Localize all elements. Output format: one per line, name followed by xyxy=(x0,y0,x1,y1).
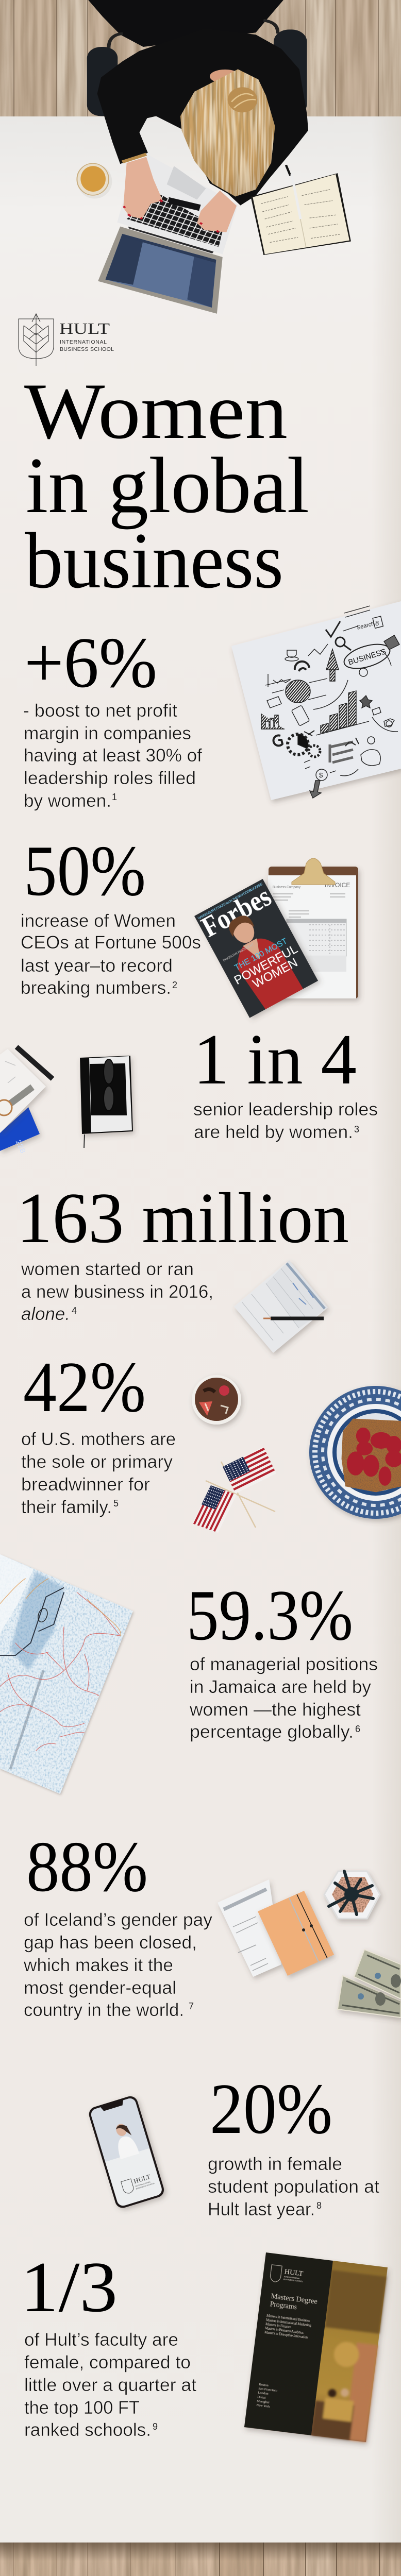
brochure logo: HULT xyxy=(284,2267,304,2278)
brochure logo xyxy=(270,2265,305,2285)
illustration: Forbes magazine: WOMEN xyxy=(250,956,300,991)
illustration: watch, marble paper and blue card: 228 xyxy=(13,1139,27,1155)
stat: +6%: - boost to net profit xyxy=(23,701,177,721)
pen xyxy=(271,1317,324,1320)
brochure photo details xyxy=(311,2270,387,2442)
stat: 20%: 8 xyxy=(316,2200,322,2211)
gold clip xyxy=(292,858,335,885)
stat: 1/3: ranked schools. xyxy=(24,2420,151,2440)
brochure title: Dubai xyxy=(257,2395,266,2400)
hands xyxy=(123,157,237,232)
wood floor bottom xyxy=(0,2543,401,2576)
phone logo: BUSINESS SCHOOL xyxy=(136,2182,156,2190)
illustration: phone with Hult page xyxy=(87,2094,166,2210)
stat: 50%: increase of Women xyxy=(21,911,176,931)
stat: +6%: having at least 30% of xyxy=(24,745,202,766)
stat: 163 million: alone. xyxy=(21,1304,70,1324)
stat: 1 in 4: senior leadership roles xyxy=(193,1099,378,1120)
title: Women xyxy=(24,367,288,455)
toast and strawberries xyxy=(342,1418,401,1492)
stat: 20% xyxy=(208,2069,379,2219)
stat: 88%: 88% xyxy=(26,1827,148,1907)
stat: +6% xyxy=(23,623,202,811)
stat: 50%: last year–to record xyxy=(21,956,173,976)
chair xyxy=(87,0,307,116)
stat: 1 in 4: 1 in 4 xyxy=(193,1020,357,1099)
stat: 1/3: the top 100 FT xyxy=(24,2398,140,2418)
icon: wheat shield xyxy=(19,314,54,366)
stat: 88%: 7 xyxy=(189,2001,194,2011)
illustration: blue willow plate with toast xyxy=(309,1386,401,1519)
stat: 42%: of U.S. mothers are xyxy=(21,1429,176,1449)
stat: 20%: student population at xyxy=(208,2177,379,2197)
stat: 59.3%: 59.3% xyxy=(187,1575,353,1655)
stat: +6%: by women. xyxy=(24,791,111,811)
stat: 1/3: 1/3 xyxy=(21,2247,118,2327)
brochure title: Masters in International Marketing xyxy=(266,2318,312,2328)
brochure title: Masters in International Business xyxy=(266,2314,310,2323)
stat: 163 million: 4 xyxy=(72,1306,77,1316)
wood floor top xyxy=(0,0,401,116)
stat: 163 million xyxy=(16,1178,349,1324)
flag two xyxy=(192,1485,237,1533)
stat: 20%: Hult last year. xyxy=(208,2199,315,2219)
stat: 163 million: a new business in 2016, xyxy=(21,1282,213,1302)
watch xyxy=(122,154,146,162)
illustration: invoice on clipboard: INVOICE xyxy=(325,882,350,889)
logo: Hult International Business School: INTERNATIONAL xyxy=(60,339,107,345)
stat: 50% xyxy=(21,831,201,998)
stat: 88%: which makes it the xyxy=(23,1955,173,1975)
illustration: watch, marble paper and blue card xyxy=(0,1047,53,1155)
brochure title xyxy=(255,2292,318,2413)
cover headline: THE 100 MOST xyxy=(233,937,289,972)
stat: 163 million: women started or ran xyxy=(21,1259,194,1279)
title xyxy=(24,367,309,605)
stat: +6%: +6% xyxy=(24,623,157,703)
stat: 42%: 42% xyxy=(23,1347,146,1427)
stat: 50%: CEOs at Fortune 500s xyxy=(21,933,201,953)
illustration: Forbes magazine: WARREN BUFFETT GOES ALL IN · THE SEAFOOD BILLIONAIRE xyxy=(197,882,264,921)
illustration: succulent in hexagon pot xyxy=(324,1871,380,1919)
stat: 59.3%: percentage globally. xyxy=(190,1722,354,1742)
illustration: business doodle paper: 8 xyxy=(375,619,379,627)
illustration: Masters Degree Programs brochure xyxy=(244,2252,388,2442)
stat: 42%: 5 xyxy=(113,1498,119,1509)
illustration: dollar bills xyxy=(338,1950,401,2018)
illustration: Forbes magazine: BRAZILIAN PRESIDENT xyxy=(223,943,255,962)
laptop screen xyxy=(98,227,223,314)
woman in photo xyxy=(115,2124,139,2159)
brochure title: Shanghai xyxy=(257,2399,270,2404)
invoice text: Business Company xyxy=(273,886,300,889)
logo: Hult International Business School xyxy=(19,314,114,366)
doodle: business badge: BUSINESS xyxy=(347,647,387,667)
laptop base and keyboard xyxy=(117,155,238,254)
hair xyxy=(180,69,275,197)
stat: 59.3%: women —the highest xyxy=(189,1700,361,1720)
open notebook with pen xyxy=(250,165,351,255)
illustration: business doodle paper xyxy=(231,601,401,800)
title: business xyxy=(25,516,283,605)
illustration: planner with pen xyxy=(234,1260,328,1353)
coffee cup xyxy=(77,163,112,199)
illustration: woman at laptop seen from above xyxy=(77,0,351,314)
illustration: chocolate bowl xyxy=(192,1375,241,1425)
phone logo: HULT xyxy=(132,2173,152,2185)
brochure logo: BUSINESS SCHOOL xyxy=(283,2278,304,2283)
brochure title: Programs xyxy=(270,2299,297,2311)
illustration: road map xyxy=(0,1554,133,1794)
wordmark: HULT xyxy=(59,319,110,337)
illustration: black notebook with glasses xyxy=(80,1056,133,1148)
stat: 1 in 4 xyxy=(193,1020,378,1142)
stat: +6%: 1 xyxy=(112,792,117,802)
stat: 59.3%: 6 xyxy=(355,1724,360,1734)
stat: 1/3: of Hult’s faculty are xyxy=(24,2330,178,2350)
stat: 20%: growth in female xyxy=(208,2154,342,2174)
brochure title: Masters in Disruptive Innovation xyxy=(264,2330,308,2340)
illustration: Forbes magazine: POWERFUL xyxy=(232,942,300,988)
brochure title: Boston xyxy=(259,2383,269,2387)
woman on cover xyxy=(229,915,303,1009)
stat: 59.3%: in Jamaica are held by xyxy=(190,1677,371,1697)
stat: 88% xyxy=(23,1827,213,2020)
stat: +6%: margin in companies xyxy=(24,723,191,743)
brochure logo: INTERNATIONAL xyxy=(284,2275,300,2280)
logo: Hult International Business School: BUSINESS SCHOOL xyxy=(60,346,114,352)
masthead: Forbes xyxy=(196,880,276,943)
stat: 88%: gap has been closed, xyxy=(24,1933,197,1953)
stat: 42%: breadwinner for xyxy=(21,1475,150,1495)
illustration: invoice on clipboard xyxy=(268,858,358,998)
illustration: business doodle paper: Search xyxy=(356,621,375,631)
stat: 88%: country in the world. xyxy=(24,2000,184,2020)
stat: 1/3: little over a quarter at xyxy=(24,2375,196,2395)
stat: 50%: breaking numbers. xyxy=(21,978,171,998)
doodle: business badge xyxy=(341,639,393,673)
illustration: Forbes magazine xyxy=(194,879,318,1018)
stat: 50%: 50% xyxy=(24,831,146,911)
brochure title: London xyxy=(258,2391,269,2396)
stat: 1/3 xyxy=(21,2247,196,2440)
stat: 163 million: 163 million xyxy=(16,1178,349,1258)
stat: 20%: 20% xyxy=(210,2069,332,2149)
title: in global xyxy=(26,441,309,530)
stat: 1/3: 9 xyxy=(153,2421,158,2432)
stat: 1 in 4: are held by women. xyxy=(194,1122,353,1142)
illustration: two American flags xyxy=(192,1447,276,1533)
stat: 42%: the sole or primary xyxy=(21,1452,173,1472)
flag one xyxy=(223,1447,276,1494)
body and sleeves xyxy=(97,28,308,206)
brochure title: Masters in Finance xyxy=(265,2322,291,2329)
phone logo: INTERNATIONAL xyxy=(135,2180,152,2188)
phone logo xyxy=(121,2174,155,2194)
illustration: notes and orange folder xyxy=(218,1879,334,1977)
stat: 42%: their family. xyxy=(21,1497,112,1517)
stat: 42% xyxy=(21,1347,176,1517)
stat: 1/3: female, compared to xyxy=(24,2352,191,2372)
stat: 59.3%: of managerial positions xyxy=(190,1654,378,1674)
brochure title: New York xyxy=(256,2403,271,2409)
brochure title: Masters Degree xyxy=(271,2292,318,2306)
stat: 59.3% xyxy=(187,1575,378,1742)
stat: 1 in 4: 3 xyxy=(354,1124,359,1134)
illustration: business doodle paper: $ xyxy=(319,771,323,779)
stat: 88%: most gender-equal xyxy=(24,1978,176,1998)
brochure title: Masters in Business Analytics xyxy=(265,2326,304,2335)
brochure title: San Francisco xyxy=(258,2387,278,2393)
stat: 88%: of Iceland’s gender pay xyxy=(24,1910,213,1930)
stat: +6%: leadership roles filled xyxy=(24,768,196,788)
stat: 50%: 2 xyxy=(172,980,177,990)
